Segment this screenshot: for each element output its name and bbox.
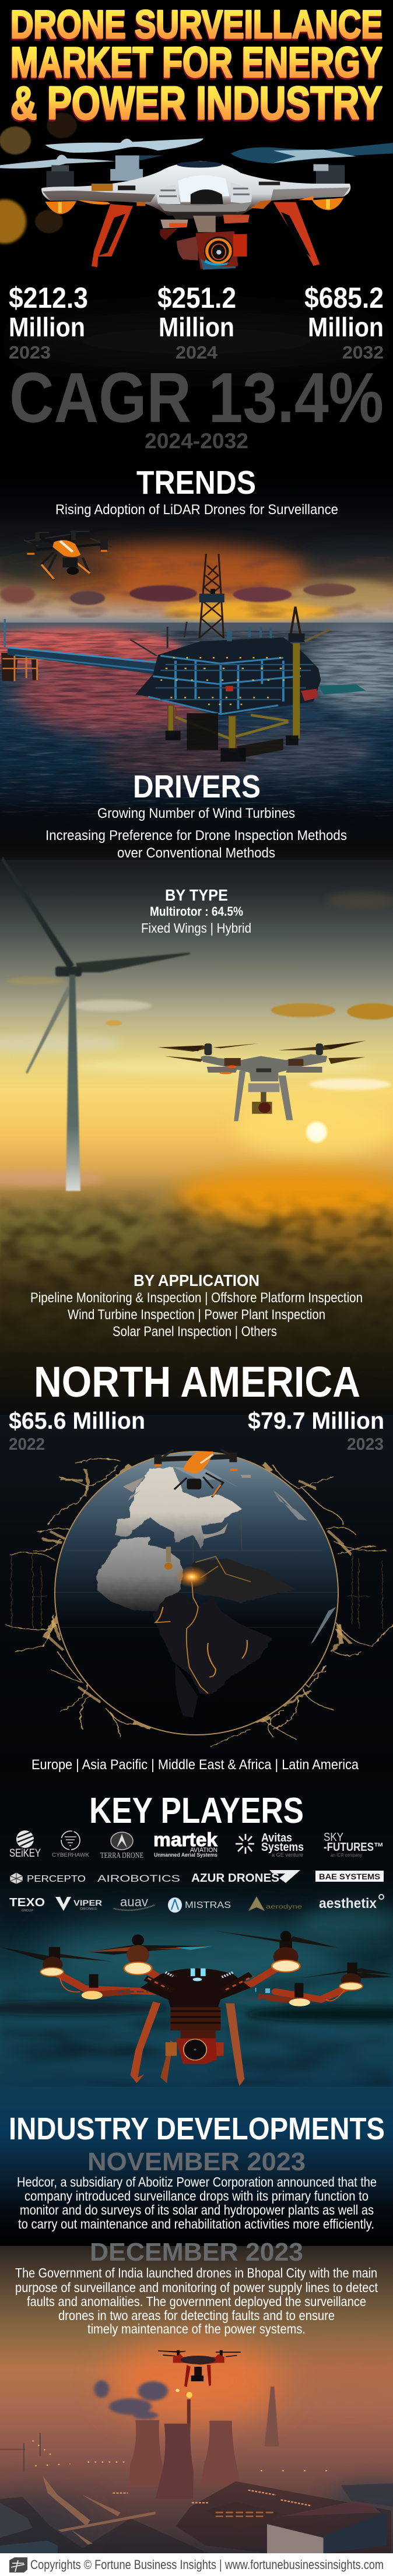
logo: Airobotics: AIROBOTICS [97,1873,180,1884]
footer [0,2553,393,2576]
text: by type: Multirotor : 64.5% [150,904,243,919]
logo: Avitas Systems: Avitas [261,1832,292,1844]
text: by application [30,1271,363,1340]
panel: globe photo [0,1415,393,1772]
logo: Aesthetix: aesthetix [319,1896,377,1911]
logo: Seikey [9,1830,41,1860]
stat: north america 2022: 2022 [9,1435,45,1454]
logo: Sky-Futures: an ICR company [331,1853,362,1858]
text: by type: BY TYPE [165,886,228,904]
stat: 2024 value: Million [159,312,234,342]
illustration: gold filaments [5,1459,393,1747]
logo: auav [114,1895,155,1910]
heading: key players: KEY PLAYERS [89,1791,304,1831]
logo: Sky-Futures [324,1831,384,1858]
text: december development [15,2265,378,2336]
title [10,2,383,129]
logo: Viper Drones: DRONES [80,1907,97,1911]
icon: dark drone with red arms [158,2350,241,2387]
stat: 2024 value [157,282,236,363]
icon: quadcopter at sunset [158,1041,366,1121]
illustration: oil rig structure [1,554,366,762]
text: december development: drones in two areas for detecting faults and to ensure [58,2308,335,2323]
panel: offshore rig photo [0,476,393,857]
logo: Mistras [168,1897,231,1913]
logo: Sky-Futures: SKY [324,1831,343,1844]
text: by application: BY APPLICATION [134,1271,259,1289]
stat: 2023 value: 2023 [9,342,51,363]
logos: key players grid [9,1829,384,1913]
stat: 2032 value: $685.2 [304,282,384,314]
logo: Cyberhawk [52,1831,89,1858]
logo: Seikey: SEiKEY [9,1847,41,1860]
heading: trends: Rising Adoption of LiDAR Drones for Surveillance [55,502,338,518]
logo: Avitas Systems: Systems [261,1841,304,1854]
logo: Avitas Systems: a GE venture [272,1852,303,1858]
stat: 2032 value: 2032 [342,342,384,363]
logo: Percepto [10,1872,86,1884]
logo: BAE Systems: BAE SYSTEMS [319,1872,380,1881]
icon: orange hexacopter [24,530,111,580]
text: by application: Wind Turbine Inspection | Power Plant Inspection [68,1307,325,1323]
logo: Martek Aviation: Unmanned Aerial Systems [154,1852,217,1858]
stat: north america 2022: $65.6 Million [9,1407,145,1434]
illustration: cooling towers and city [0,2380,393,2553]
stat: 2024 value: 2024 [176,342,218,363]
stat: north america 2022 [9,1407,145,1454]
text: other regions: Europe | Asia Pacific | Middle East & Africa | Latin America [31,1757,359,1773]
logo: Viper Drones [55,1897,102,1911]
stat: CAGR: 2024-2032 [145,429,248,453]
heading: december 2023: DECEMBER 2023 [90,2238,303,2266]
stat: 2032 value: Million [308,312,384,342]
heading: trends [55,464,338,518]
icon: orange drone over globe [154,1450,238,1497]
stat: north america 2023: $79.7 Million [248,1407,384,1434]
panel: wind turbine sunset photo [0,857,393,1415]
logo: Azur Drones [191,1870,300,1885]
icon: hero drone [0,138,393,270]
illustration: wind turbine [1,857,190,1191]
stat: north america 2023: 2023 [347,1435,384,1454]
logo: Terra Drone [100,1832,143,1860]
logo: Martek Aviation: martek [153,1829,218,1850]
logo: auav: auav [120,1895,148,1909]
icon: large hexacopter [0,1931,393,2086]
panel: key players night photo [0,1772,393,2246]
text: by application: Solar Panel Inspection | Others [113,1324,277,1340]
heading: november 2023: NOVEMBER 2023 [87,2148,306,2176]
heading: drivers: Growing Number of Wind Turbines [97,806,295,821]
panel: power plant photo [0,2246,393,2555]
heading: drivers [45,768,347,861]
stat: 2023 value: $212.3 [9,282,88,314]
heading: north america: NORTH AMERICA [34,1358,360,1406]
text: december development: timely maintenance of the power systems. [87,2321,306,2336]
logo: Cyberhawk: CYBERHAWK [52,1852,89,1858]
text: november development [17,2174,377,2231]
heading: trends: TRENDS [136,464,256,501]
logo: Terra Drone: TERRA DRONE [100,1851,143,1860]
logo: Azur Drones: AZUR DRONES [191,1872,279,1885]
icon: sun [305,1120,328,1144]
stat: north america 2023 [248,1407,384,1454]
logo: Percepto: PERCEPTO [27,1874,86,1884]
text: by type [141,886,251,936]
logo: Avitas Systems [236,1832,304,1858]
logo: Aerodyne: aerodyne [266,1904,303,1910]
heading: drivers: over Conventional Methods [117,845,275,861]
heading: drivers: DRIVERS [133,768,261,804]
logo: Aerodyne [248,1896,303,1911]
stat: 2024 value: $251.2 [157,282,236,314]
logo: Viper Drones: VIPER [73,1898,102,1907]
stat: 2023 value [9,282,88,363]
heading: drivers: Increasing Preference for Drone Inspection Methods [45,828,347,844]
logo: Texo: GROUP [22,1909,34,1913]
stat: 2032 value [304,282,384,363]
icon: Fortune Business Insights logo [9,2557,27,2573]
illustration: globe [54,1452,338,1735]
logo: Martek Aviation: AVIATION [190,1847,217,1854]
logo: Texo: TEXO [9,1896,45,1909]
panel: header black background [0,0,393,484]
stat: 2023 value: Million [9,312,85,342]
text: by type: Fixed Wings | Hybrid [141,920,251,936]
logo: Mistras: MISTRAS [185,1900,231,1910]
logo: Sky-Futures: -FUTURES™ [324,1841,384,1854]
